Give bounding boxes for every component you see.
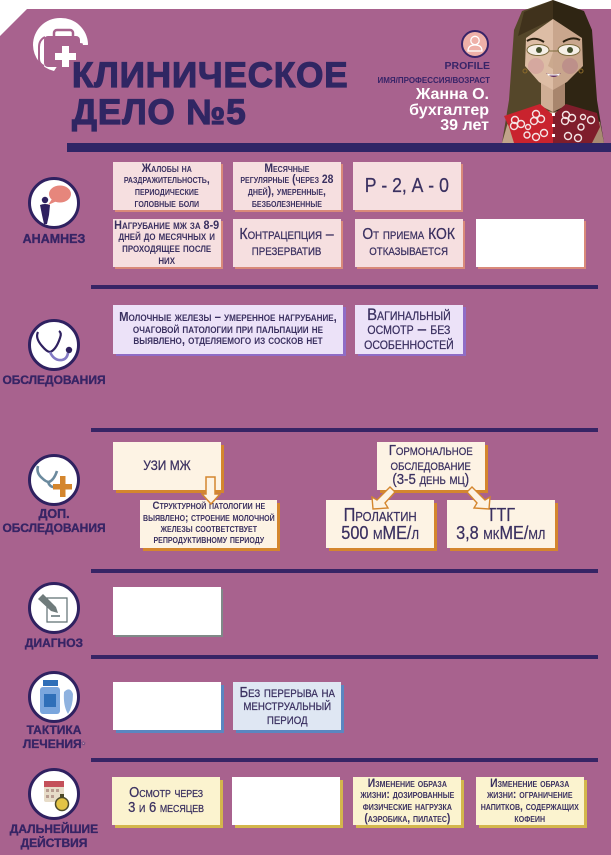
card: complaints: периодические	[135, 184, 199, 198]
card: obstetric history	[353, 162, 461, 210]
heading: additional examinations: ДОП.	[38, 507, 70, 521]
card: complaints: головные боли	[135, 196, 199, 210]
card: ultrasound result	[140, 500, 277, 548]
card: breast engorgement	[113, 219, 221, 267]
card: complaints: Жалобы на	[142, 161, 192, 175]
card: caffeine: жизни: ограничение	[487, 787, 573, 801]
card: vaginal exam: Вагинальный	[367, 305, 451, 324]
profile values: 39 лет	[440, 117, 489, 134]
heading: further actions: ДЕЙСТВИЯ	[21, 836, 87, 850]
card: breast exam	[113, 305, 343, 354]
heading: additional examinations: ОБСЛЕДОВАНИЯ	[2, 521, 106, 535]
card: prolactin: 500 мМЕ/л	[341, 522, 419, 543]
card: breast exam: выявлено, отделяемого из сосков нет	[133, 333, 323, 347]
card: breast exam: очаговой патологии при пальпации не	[133, 322, 323, 336]
icon: medicine bottle	[28, 671, 80, 723]
portrait of patient	[502, 0, 604, 143]
card: contraception: Контрацепция –	[240, 226, 334, 243]
card: no break: менструальный	[243, 697, 331, 714]
profile label: ИМЯ/ПРОФЕССИЯ/ВОЗРАСТ	[377, 76, 490, 85]
heading: further actions	[10, 822, 98, 850]
card: menses: безболезненные	[252, 196, 322, 210]
card: ultrasound result: выявлено; строение молочной	[143, 512, 274, 524]
card: contraception: презерватив	[252, 242, 322, 259]
card: caffeine: Изменение образа	[490, 776, 570, 790]
card: vaginal exam: осмотр – без	[368, 319, 450, 338]
heading: examination: ОБСЛЕДОВАНИЯ	[2, 373, 106, 387]
card: no break	[233, 682, 341, 730]
empty card	[113, 682, 221, 730]
card: breast exam: Молочные железы – умеренное нагрубание,	[119, 310, 337, 324]
card: menses: Месячные	[264, 161, 310, 175]
section: diagnosis	[24, 582, 223, 650]
card: exercise: (аэробика, пилатес)	[364, 811, 450, 825]
heading: anamnesis: АНАМНЕЗ	[23, 232, 85, 246]
card: caffeine: кофеин	[515, 811, 545, 825]
card: exercise	[353, 777, 461, 825]
card: follow-up	[112, 777, 220, 825]
icon: pen and scroll	[28, 582, 80, 634]
card: breast engorgement: проходящее после	[122, 241, 212, 255]
profile values	[409, 86, 489, 134]
card: COC: отказывается	[370, 242, 448, 259]
heading: treatment: ТАКТИКА	[27, 723, 81, 737]
section: examination	[2, 305, 466, 387]
profile values: бухгалтер	[409, 102, 489, 118]
card: exercise: физические нагрузка	[362, 799, 452, 813]
card: ultrasound result: репродуктивному периоду	[153, 534, 264, 546]
title	[72, 56, 349, 132]
card: caffeine: напитков, содержащих	[481, 799, 579, 813]
card: menses	[233, 162, 341, 210]
empty card	[232, 777, 340, 825]
card: caffeine	[476, 777, 584, 825]
card: prolactin: Пролактин	[343, 504, 417, 525]
card: hormonal tests: Гормональное	[389, 442, 473, 459]
section: further actions	[10, 768, 587, 850]
card: breast engorgement: дней до месячных и	[119, 229, 215, 243]
card: breast engorgement: них	[159, 253, 175, 267]
heading: additional examinations	[2, 507, 106, 535]
card: exercise: жизни: дозированные	[360, 787, 454, 801]
title: КЛИНИЧЕСКОЕ	[72, 56, 349, 95]
card: COC	[355, 219, 463, 267]
title: ДЕЛО №5	[72, 93, 247, 132]
card: prolactin	[326, 500, 434, 548]
card: menses: регулярные (через 28	[240, 172, 334, 186]
arrow: ultrasound to result	[201, 476, 221, 505]
card: breast engorgement: Нагрубание мж за 8-9	[114, 218, 220, 232]
heading: treatment: ЛЕЧЕНИЯ*	[23, 736, 85, 750]
section: treatment	[22, 671, 344, 750]
card: ultrasound result: Структурной патологии не	[152, 500, 265, 512]
card: hormonal tests: (3-5 день мц)	[393, 471, 469, 488]
icon: stethoscope	[28, 319, 80, 371]
card: no break: период	[267, 711, 307, 728]
card: breast ultrasound: УЗИ МЖ	[143, 458, 191, 473]
card: COC: От приема КОК	[363, 226, 455, 243]
card: TSH: 3,8 мкМЕ/мл	[456, 522, 546, 543]
card: vaginal exam	[355, 305, 463, 354]
card: exercise: Изменение образа	[367, 776, 447, 790]
icon: stethoscope with plus	[28, 454, 80, 506]
empty card	[476, 219, 584, 267]
header bar	[67, 143, 611, 152]
icon: person with speech bubble	[28, 177, 80, 229]
card: obstetric history: Р - 2, А - 0	[365, 175, 449, 197]
card: TSH	[447, 500, 555, 548]
card: menses: дней), умеренные,	[248, 184, 326, 198]
card: follow-up: Осмотр через	[129, 785, 203, 801]
heading: treatment	[22, 723, 86, 750]
card: TSH: ТТГ	[487, 504, 515, 525]
card: hormonal tests: обследование	[391, 457, 471, 474]
icon: calendar with clock	[28, 768, 80, 820]
card: breast ultrasound	[113, 442, 221, 490]
profile block	[377, 30, 490, 134]
card: complaints	[113, 162, 221, 210]
card: follow-up: 3 и 6 месяцев	[128, 800, 204, 816]
card: contraception	[233, 219, 341, 267]
section: anamnesis	[22, 161, 586, 269]
card: complaints: раздражительность,	[124, 172, 210, 186]
card: no break: Без перерыва на	[239, 684, 335, 701]
card: ultrasound result: железы соответствует	[160, 523, 257, 535]
card: vaginal exam: особенностей	[364, 334, 454, 353]
icon: profile	[461, 30, 489, 58]
arrow: hormones to prolactin	[371, 486, 395, 510]
heading: further actions: ДАЛЬНЕЙШИЕ	[10, 822, 98, 836]
card: hormonal tests	[377, 442, 485, 490]
profile values: Жанна О.	[416, 86, 489, 103]
heading: diagnosis: ДИАГНОЗ	[25, 636, 83, 650]
arrow: hormones to TSH	[467, 486, 491, 510]
section: additional examinations	[2, 442, 558, 551]
profile heading: PROFILE	[444, 60, 490, 72]
icon: medical bag logo	[33, 18, 88, 71]
empty card	[113, 587, 221, 635]
